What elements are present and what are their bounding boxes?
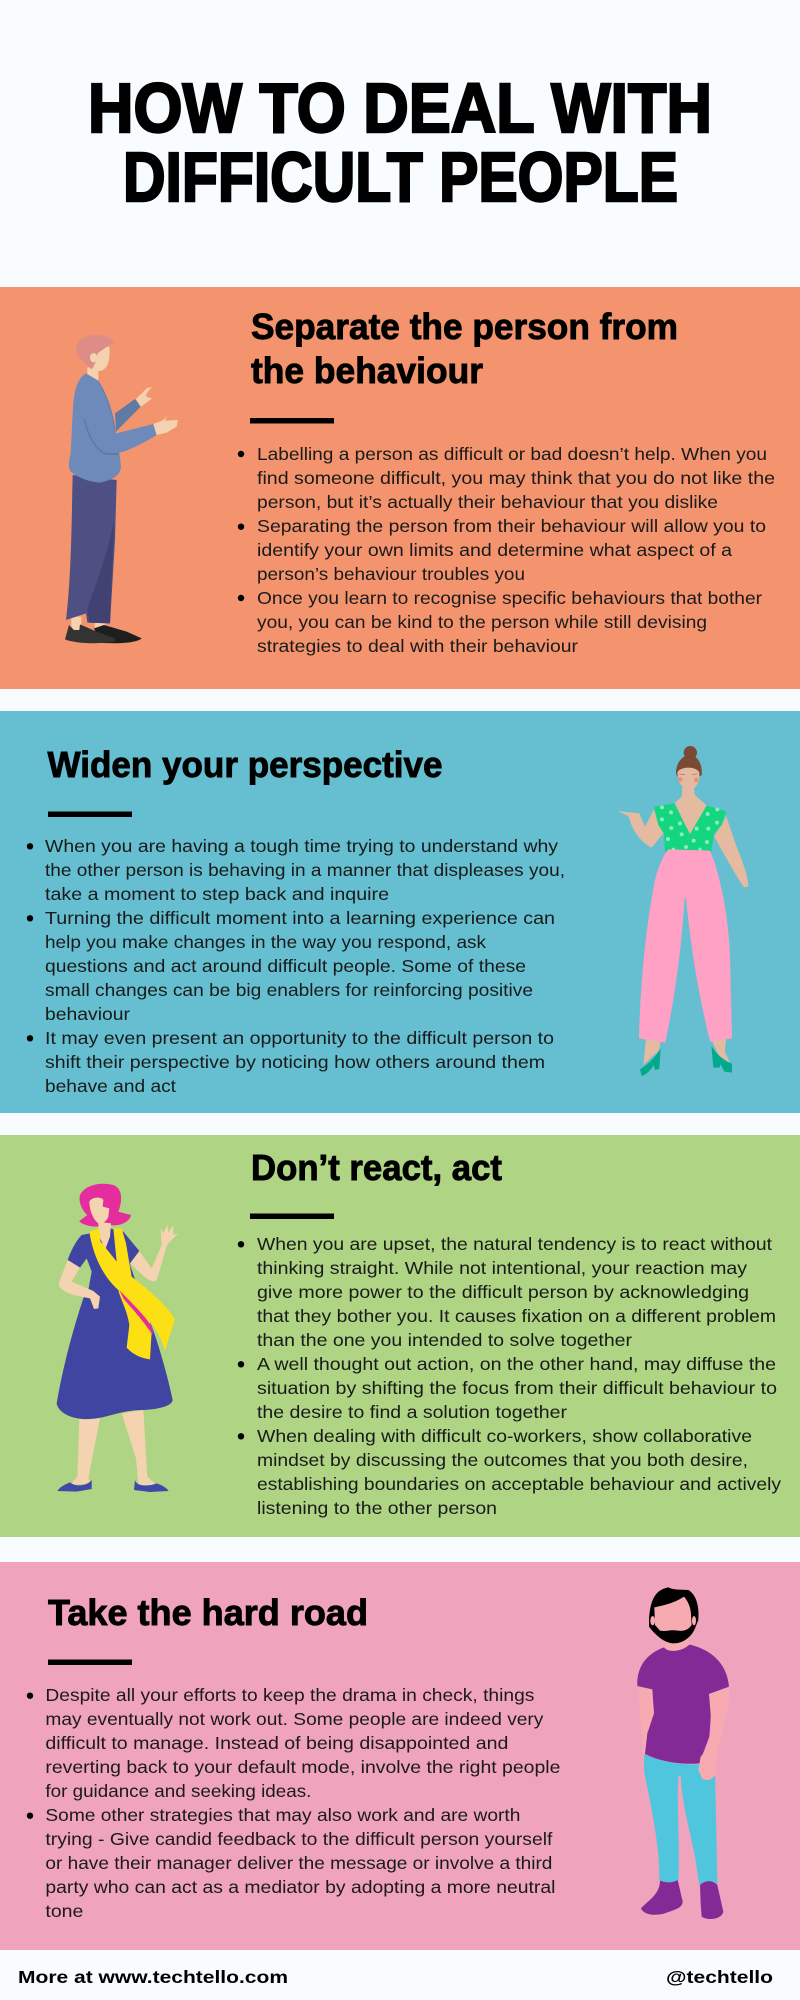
bullet list: take the hard road: trying - Give candid feedback to the difficult person yourself bbox=[45, 1829, 553, 1849]
panel: don't react, act bbox=[0, 1135, 800, 1537]
bullet list: widen your perspective: behave and act bbox=[45, 1076, 176, 1096]
bullet list: don't react, act: thinking straight. While not intentional, your reaction may bbox=[257, 1258, 747, 1278]
icon: woman in blue dress with yellow scarf bbox=[57, 1184, 178, 1492]
heading: separate the person bbox=[251, 306, 678, 391]
bullet list: don't react, act: give more power to the difficult person by acknowledging bbox=[257, 1282, 749, 1302]
bullet list: don't react, act: that they bother you. It causes fixation on a different problem bbox=[257, 1306, 776, 1326]
title bbox=[88, 69, 712, 216]
bullet list: separate the person: strategies to deal with their behaviour bbox=[257, 636, 578, 656]
heading: separate the person: the behaviour bbox=[251, 350, 483, 391]
bullet list: widen your perspective: the other person is behaving in a manner that displeases you, bbox=[45, 860, 565, 880]
panel: take the hard road bbox=[0, 1562, 800, 1950]
bullet list: take the hard road: reverting back to your default mode, involve the right people bbox=[45, 1757, 560, 1777]
bullet list: widen your perspective bbox=[27, 836, 565, 1096]
bullet list: separate the person: Separating the person from their behaviour will allow you to bbox=[257, 516, 766, 536]
bullet list: widen your perspective: Turning the difficult moment into a learning experience can bbox=[45, 908, 555, 928]
bullet list: take the hard road: tone bbox=[45, 1901, 83, 1921]
bullet list: widen your perspective: take a moment to step back and inquire bbox=[45, 884, 389, 904]
bullet list: don't react, act bbox=[238, 1234, 781, 1518]
bullet list: take the hard road: for guidance and seeking ideas. bbox=[45, 1781, 311, 1801]
bullet list: separate the person bbox=[238, 444, 775, 656]
bullet list: separate the person: Labelling a person as difficult or bad doesn’t help. When you bbox=[257, 444, 767, 464]
bullet list: widen your perspective: When you are having a tough time trying to understand why bbox=[45, 836, 558, 856]
bullet list: take the hard road: may eventually not work out. Some people are indeed very bbox=[45, 1709, 544, 1729]
bullet list: take the hard road: difficult to manage. Instead of being disappointed and bbox=[45, 1733, 508, 1753]
bullet list: separate the person: identify your own limits and determine what aspect of a bbox=[257, 540, 732, 560]
icon: bearded man in purple shirt and blue jeans bbox=[637, 1587, 729, 1919]
bullet list: take the hard road: or have their manager deliver the message or involve a third bbox=[45, 1853, 552, 1873]
bullet list: take the hard road bbox=[27, 1685, 560, 1921]
bullet list: don't react, act: the desire to find a solution together bbox=[257, 1402, 567, 1422]
heading: widen your perspective: Widen your perspective bbox=[48, 744, 442, 785]
panel: separate the person from the behaviour bbox=[0, 287, 800, 689]
bullet list: don't react, act: listening to the other person bbox=[257, 1498, 497, 1518]
bullet list: widen your perspective: shift their perspective by noticing how others around them bbox=[45, 1052, 545, 1072]
bullet list: separate the person: find someone difficult, you may think that you do not like the bbox=[257, 468, 775, 488]
bullet list: don't react, act: establishing boundaries on acceptable behaviour and actively bbox=[257, 1474, 781, 1494]
heading: separate the person: Separate the person from bbox=[251, 306, 678, 347]
footer: social handle: @techtello bbox=[666, 1967, 773, 1987]
title: HOW TO DEAL WITH bbox=[88, 69, 712, 147]
bullet list: widen your perspective: small changes can be big enablers for reinforcing positive bbox=[45, 980, 533, 1000]
bullet list: widen your perspective: questions and act around difficult people. Some of these bbox=[45, 956, 526, 976]
bullet list: separate the person: Once you learn to recognise specific behaviours that bother bbox=[257, 588, 762, 608]
bullet list: take the hard road: party who can act as a mediator by adopting a more neutral bbox=[45, 1877, 555, 1897]
bullet list: don't react, act: When dealing with difficult co-workers, show collaborative bbox=[257, 1426, 752, 1446]
bullet list: widen your perspective: help you make changes in the way you respond, ask bbox=[45, 932, 486, 952]
heading: take the hard road: Take the hard road bbox=[48, 1592, 368, 1633]
bullet list: don't react, act: than the one you intended to solve together bbox=[257, 1330, 632, 1350]
panel: widen your perspective bbox=[0, 711, 800, 1113]
bullet list: don't react, act: A well thought out action, on the other hand, may diffuse the bbox=[257, 1354, 776, 1374]
bullet list: separate the person: you, you can be kind to the person while still devising bbox=[257, 612, 707, 632]
bullet list: don't react, act: situation by shifting the focus from their difficult behaviour to bbox=[257, 1378, 777, 1398]
bullet list: don't react, act: mindset by discussing the outcomes that you both desire, bbox=[257, 1450, 748, 1470]
bullet list: don't react, act: When you are upset, the natural tendency is to react without bbox=[257, 1234, 772, 1254]
title: DIFFICULT PEOPLE bbox=[123, 138, 678, 216]
bullet list: separate the person: person’s behaviour troubles you bbox=[257, 564, 525, 584]
heading: don't react, act: Don’t react, act bbox=[251, 1147, 502, 1188]
bullet list: widen your perspective: behaviour bbox=[45, 1004, 130, 1024]
icon: woman in green top and pink trousers bbox=[617, 746, 748, 1076]
bullet list: separate the person: person, but it’s actually their behaviour that you dislike bbox=[257, 492, 718, 512]
bullet list: widen your perspective: It may even present an opportunity to the difficult person to bbox=[45, 1028, 554, 1048]
icon: man in blue sweater gesturing bbox=[65, 334, 178, 643]
bullet list: take the hard road: Despite all your efforts to keep the drama in check, things bbox=[45, 1685, 535, 1705]
footer: website link: More at www.techtello.com bbox=[18, 1967, 288, 1987]
bullet list: take the hard road: Some other strategies that may also work and are worth bbox=[45, 1805, 520, 1825]
